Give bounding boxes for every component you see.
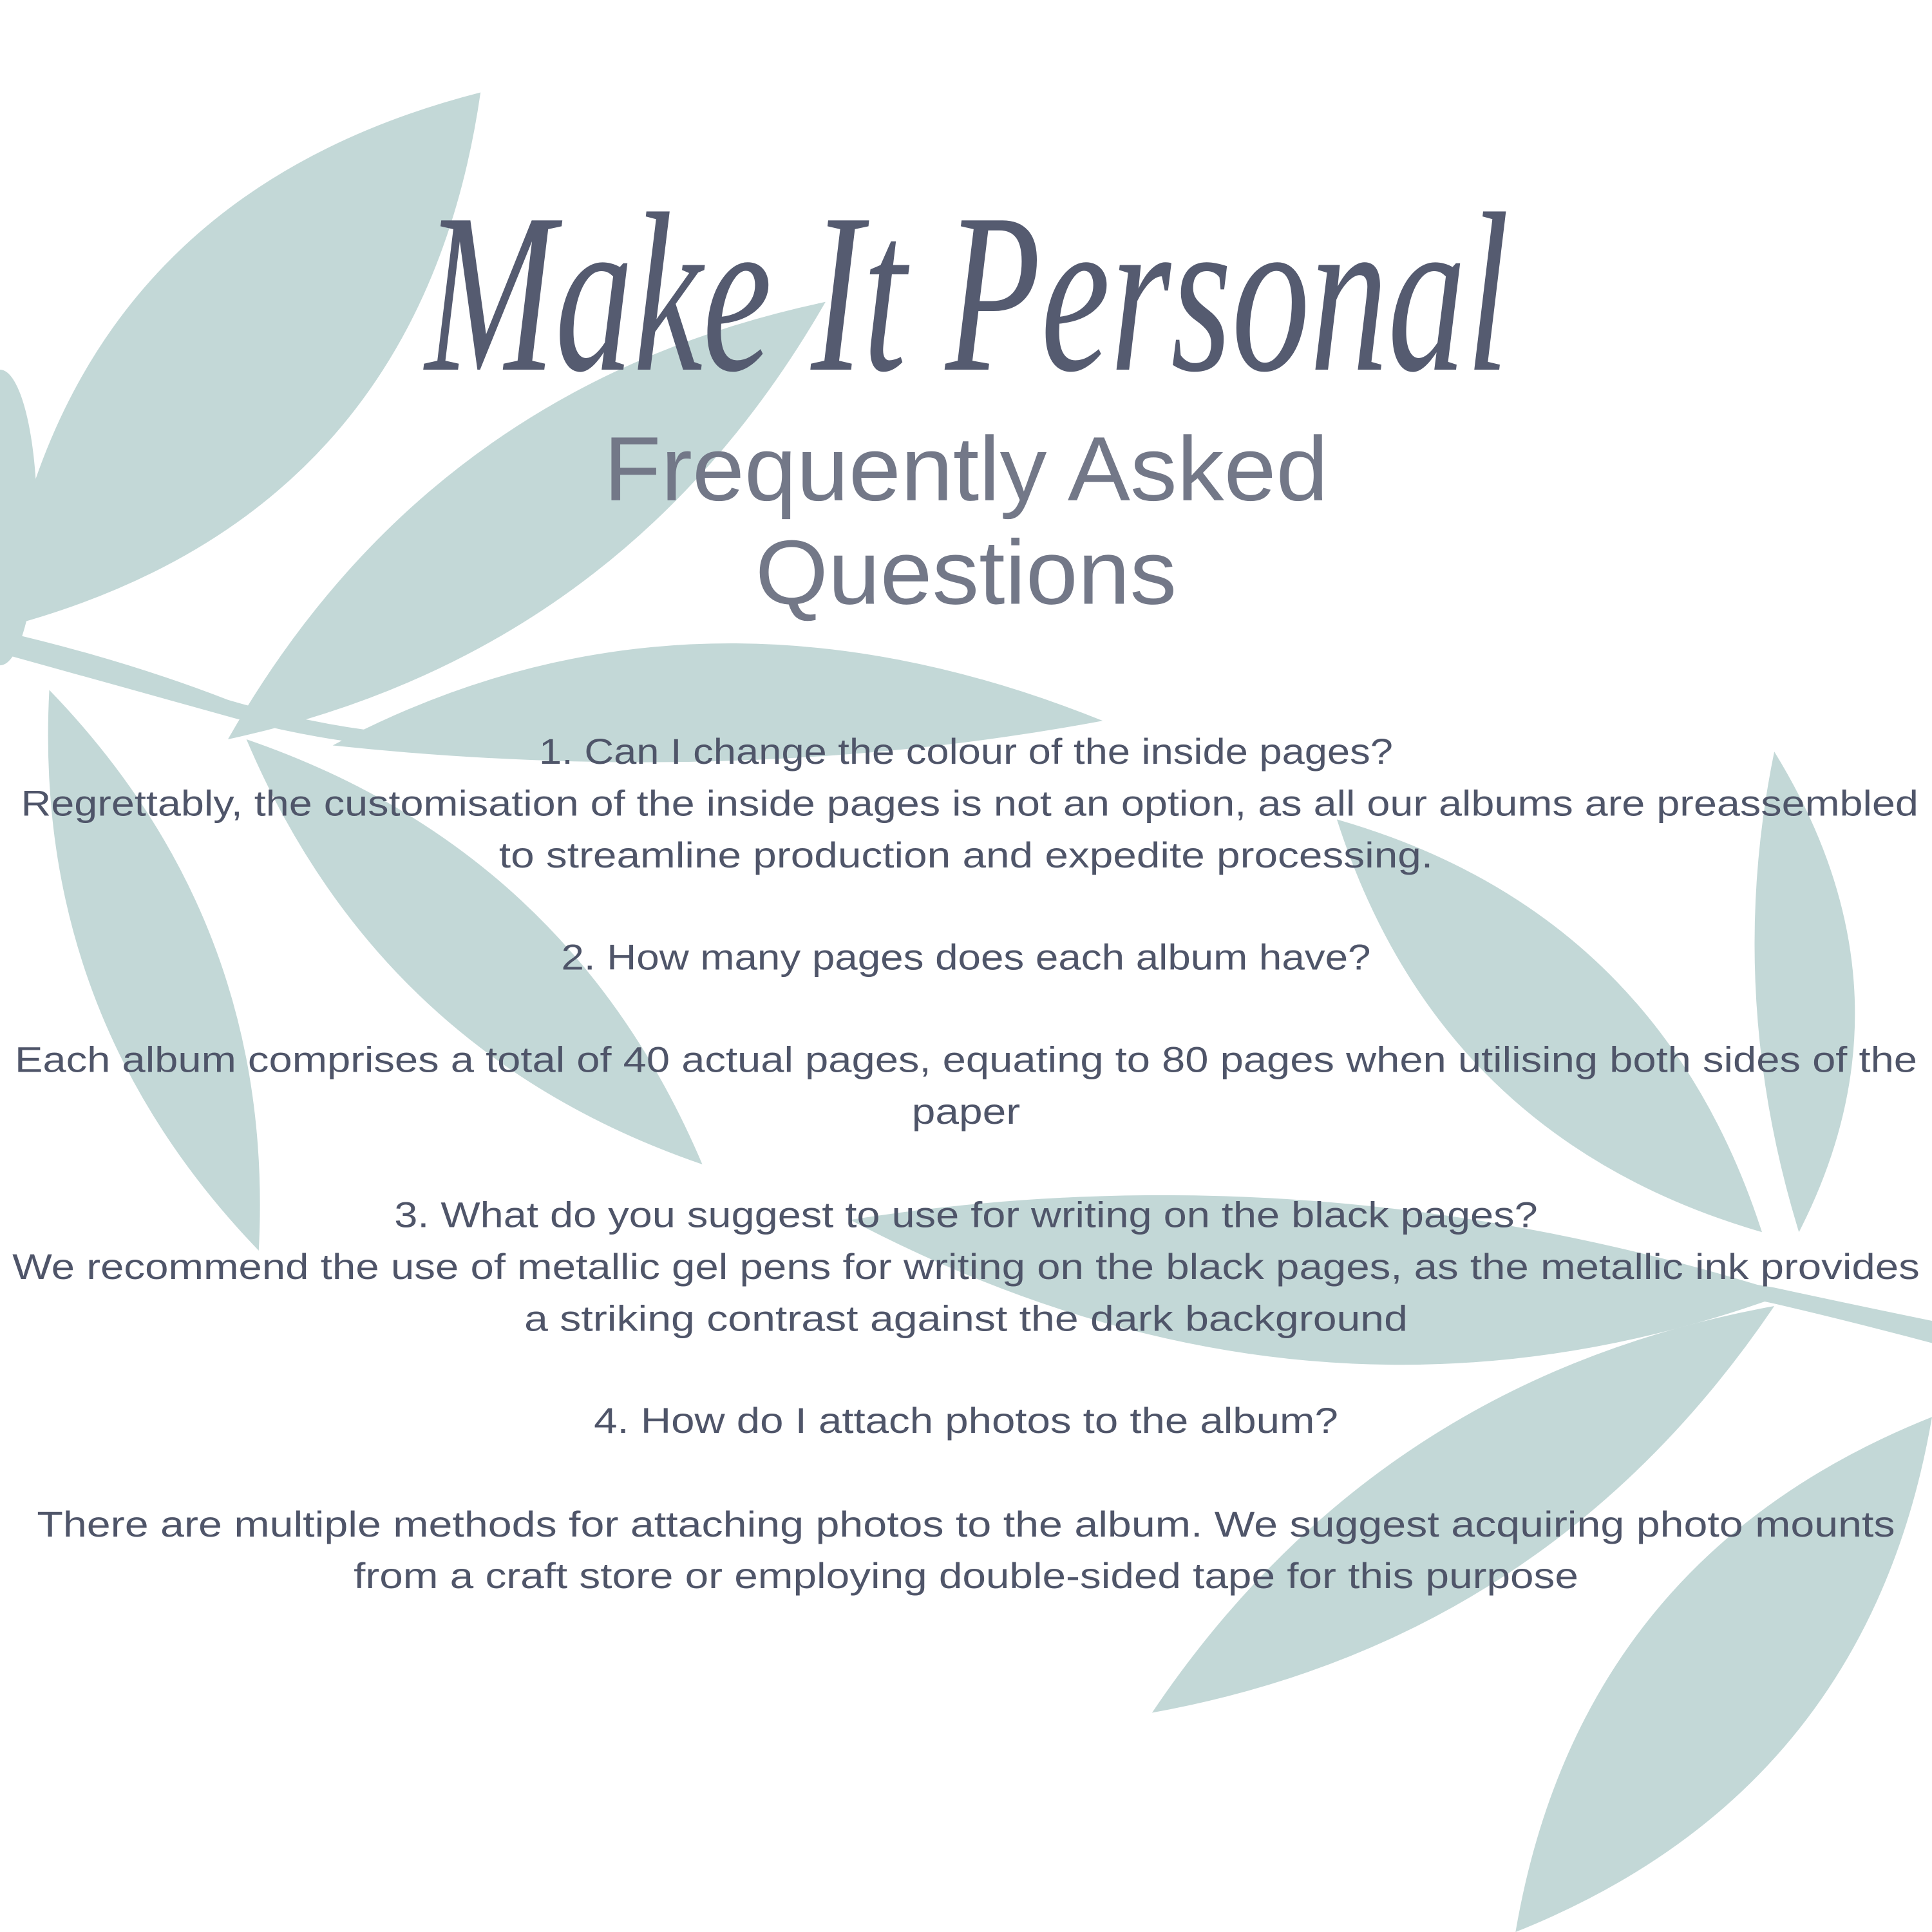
question 1: 1. Can I change the colour of the inside pages?: [539, 732, 1393, 772]
FAQ text block: We recommend the use of metallic gel pens for writing on the black pages, as the metallic ink provides: [12, 1247, 1920, 1287]
FAQ text block: from a craft store or employing double-sided tape for this purpose: [354, 1556, 1578, 1596]
leaf: left edge: [0, 370, 37, 665]
FAQ text block: There are multiple methods for attaching photos to the album. We suggest acquiring photo mounts: [37, 1504, 1895, 1544]
leaf: diagonal up: [228, 302, 826, 739]
background leaves right branch: [850, 752, 1932, 1932]
subtitle: [603, 419, 1328, 623]
leaf: down left: [48, 690, 260, 1251]
leaf: horizontal: [850, 1195, 1786, 1365]
FAQ text block: Each album comprises a total of 40 actual pages, equating to 80 pages when utilising both sides of the: [15, 1040, 1917, 1080]
leaf: upper diagonal: [1337, 819, 1762, 1232]
question 3: 3. What do you suggest to use for writing on the black pages?: [394, 1195, 1538, 1235]
question 2: 2. How many pages does each album have?: [561, 938, 1371, 978]
leaf: right edge upright: [1754, 752, 1855, 1232]
FAQ text block: [12, 732, 1920, 1596]
leaf: bottom right: [1515, 1417, 1932, 1932]
stem left: [0, 631, 530, 749]
stem right: [1700, 1275, 1932, 1343]
question 4: 4. How do I attach photos to the album?: [594, 1401, 1338, 1441]
leaf: down right: [247, 739, 703, 1164]
subtitle: Frequently Asked: [603, 419, 1328, 520]
background leaves left branch: [0, 92, 1103, 1251]
FAQ text block: Regrettably, the customisation of the inside pages is not an option, as all our albums are preassembled: [21, 784, 1918, 824]
leaf: upper left large: [0, 92, 480, 629]
FAQ text block: to streamline production and expedite processing.: [499, 835, 1433, 875]
FAQ text block: a striking contrast against the dark background: [524, 1298, 1408, 1338]
leaf: horizontal: [333, 643, 1103, 762]
leaf: lower diagonal: [1152, 1306, 1774, 1712]
FAQ text block: paper: [912, 1092, 1020, 1132]
subtitle: Questions: [755, 522, 1177, 623]
